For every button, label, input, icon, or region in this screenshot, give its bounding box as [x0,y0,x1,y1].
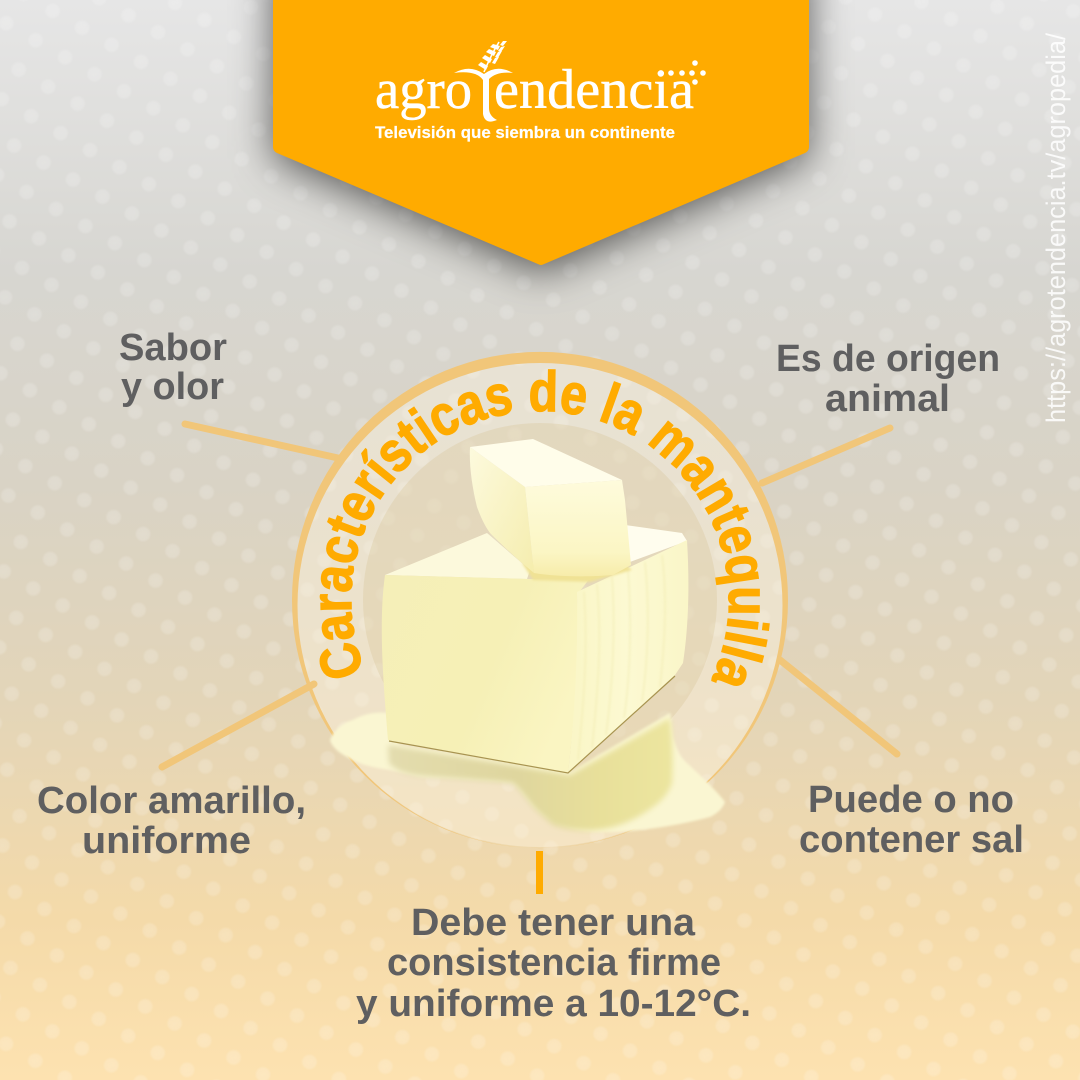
label: consistencia: Debe tener una [411,902,696,944]
header banner [273,0,809,265]
vertical url: https://agrotendencia.tv/agropedia/ [1041,33,1071,423]
label: consistencia: consistencia firme [387,942,721,984]
small block front [525,480,631,576]
butter striations [480,462,665,760]
label: consistencia [356,902,751,1025]
melted puddle [330,713,725,832]
butter shadow on puddle [388,718,673,830]
label: consistencia: y uniforme a 10-12°C. [356,983,751,1025]
logo wordmark: agro [375,59,472,121]
small block shadow [522,560,632,582]
label: color: Color amarillo, [37,780,306,822]
label: origen animal: animal [825,378,950,420]
connector lines [162,424,897,767]
curved title: Características de la mantequilla [320,369,770,686]
logo [375,41,706,142]
label: sabor y olor: Sabor [119,327,227,369]
label: sal [799,779,1024,861]
label: origen animal: Es de origen [776,338,1000,380]
logo wheat T [454,41,513,122]
image: butter [330,439,725,832]
header banner shadow [273,0,809,273]
logo tagline: Televisión que siembra un continente [375,124,675,142]
label: sal: Puede o no [808,779,1014,821]
label: color: uniforme [82,820,251,862]
label: origen animal [776,338,1000,420]
large block right [568,540,688,773]
large block front [382,575,590,773]
large block top right [625,525,687,562]
logo dots [658,60,706,85]
large block top left [385,533,530,579]
connector line: bottom [536,851,543,894]
label: color [37,780,306,862]
base edge [389,676,675,773]
label: sabor y olor [119,327,227,408]
label: sal: contener sal [799,819,1024,861]
small block top [470,439,622,487]
logo wordmark continuation: endencia [494,59,694,121]
label: sabor y olor: y olor [121,366,224,408]
panel: central circle [292,352,788,848]
small block left [470,447,534,573]
